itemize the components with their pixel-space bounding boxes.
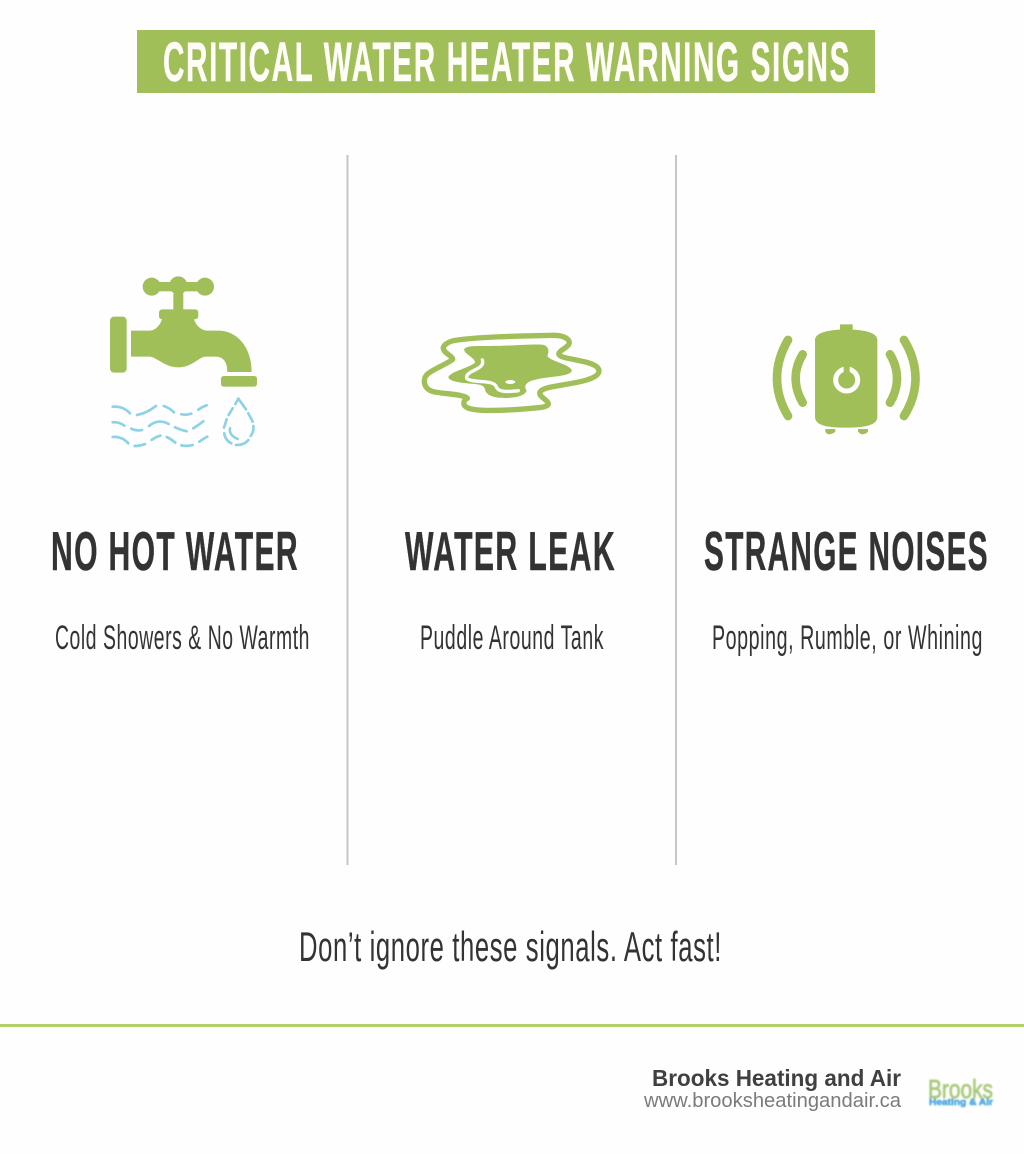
icon: faucet with cold water [110, 276, 257, 446]
cold water drop [224, 399, 253, 445]
icon: puddle [424, 335, 599, 410]
website: www.brooksheatingandair.ca [643, 1090, 902, 1112]
company logo: Brooks [928, 1074, 993, 1104]
tank body [815, 324, 877, 428]
company logo: Heating & Air [929, 1097, 994, 1107]
icon: vibrating water heater tank [777, 324, 915, 434]
panel: strange noises [704, 324, 989, 657]
power symbol [836, 369, 858, 391]
puddle highlight [467, 360, 518, 391]
description: no hot water: Cold Showers & No Warmth [55, 619, 310, 657]
panel: no hot water [51, 276, 310, 657]
puddle outer ring [424, 335, 599, 410]
heading: water leak: WATER LEAK [405, 520, 616, 582]
company name: Brooks Heating and Air [652, 1065, 901, 1091]
footer branding [643, 1065, 994, 1112]
cold water waves [113, 405, 207, 446]
sound waves [777, 340, 915, 416]
heading: no hot water: NO HOT WATER [51, 520, 299, 582]
faucet [110, 276, 257, 387]
puddle inner pool [448, 345, 572, 398]
panel: water leak [405, 335, 616, 657]
description: water leak: Puddle Around Tank [420, 619, 604, 657]
call to action: Don’t ignore these signals. Act fast! [299, 923, 722, 970]
